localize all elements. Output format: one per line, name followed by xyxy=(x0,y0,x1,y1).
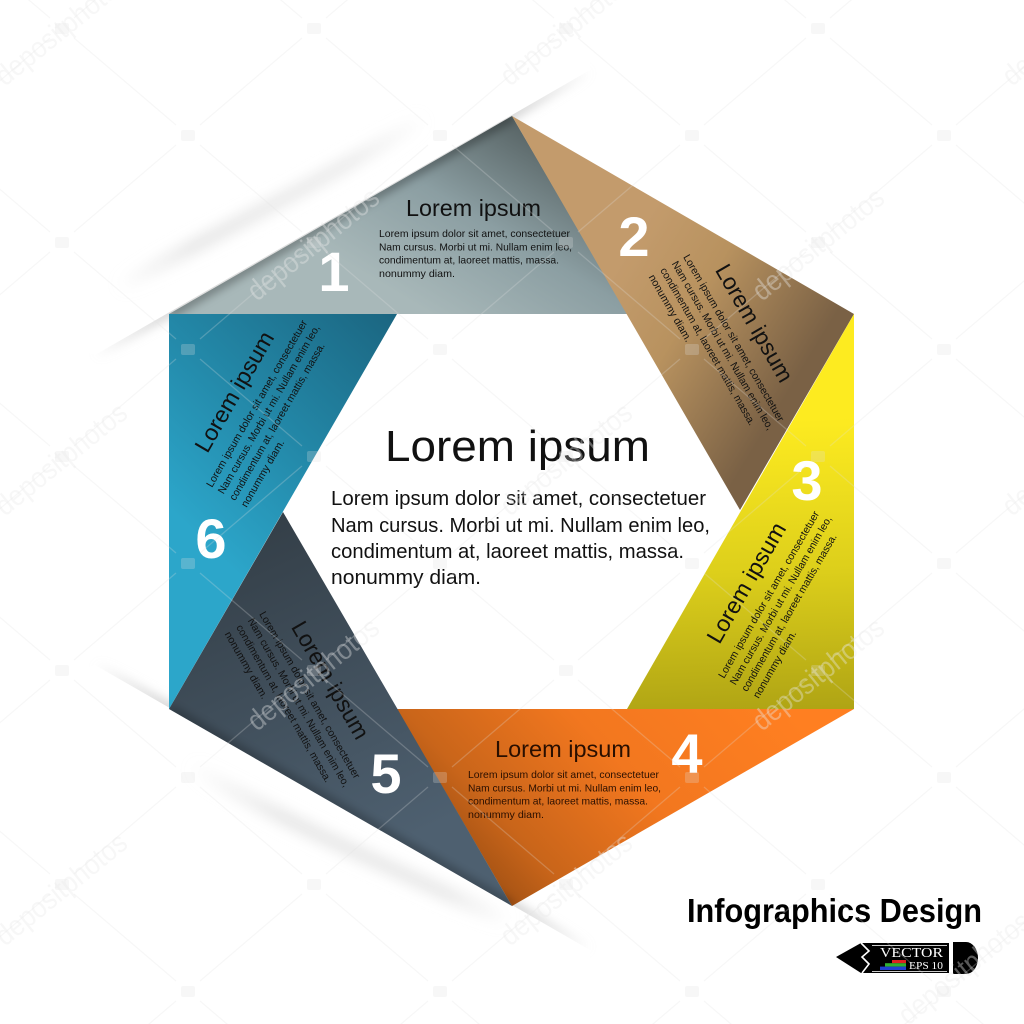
step 1 text: condimentum at, laoreet mattis, massa. xyxy=(379,255,559,267)
edge shadow xyxy=(851,314,861,709)
panel: step 4 xyxy=(397,709,854,906)
center body: nonummy diam. xyxy=(331,566,481,589)
number 2: 2 xyxy=(618,205,650,268)
step 5 text: nonummy diam. xyxy=(222,630,270,701)
panel: step 5 xyxy=(169,512,512,906)
step 3 text: condimentum at, laoreet mattis, massa. xyxy=(739,532,840,694)
panel: step 3 xyxy=(627,314,858,709)
paper fold: upper left xyxy=(60,20,590,355)
slate triangle xyxy=(169,512,512,906)
grey triangle xyxy=(169,116,628,314)
step 4 text: condimentum at, laoreet mattis, massa. xyxy=(468,796,648,808)
watermark text: depositphotos xyxy=(494,397,639,522)
orange triangle xyxy=(397,709,854,906)
step 6 text: condimentum at, laoreet mattis, massa. xyxy=(227,341,328,503)
panel: step 1 xyxy=(169,116,628,314)
paper fold: lower left xyxy=(60,665,590,1000)
step 6 text: nonummy diam. xyxy=(239,438,287,510)
step 5 text: condimentum at, laoreet mattis, massa. xyxy=(233,623,334,785)
step 6 text xyxy=(176,300,346,510)
panel: step 6 xyxy=(169,300,397,709)
step 3 text: Lorem ipsum dolor sit amet, consectetuer xyxy=(716,509,822,680)
step 2 text: Nam cursus. Morbi ut mi. Nullam enim leo, xyxy=(669,259,776,432)
number 3: 3 xyxy=(791,449,823,512)
icon: vector pencil badge: EPS 10 xyxy=(909,961,943,972)
center body: Lorem ipsum dolor sit amet, consectetuer xyxy=(331,487,706,510)
number 4: 4 xyxy=(671,722,703,785)
step 6 text: Nam cursus. Morbi ut mi. Nullam enim leo, xyxy=(216,323,323,496)
center body: Nam cursus. Morbi ut mi. Nullam enim leo, xyxy=(331,514,710,537)
blue triangle xyxy=(169,314,397,709)
yellow triangle xyxy=(627,314,854,709)
edge shadow xyxy=(169,709,512,906)
icon: vector pencil badge: VECTOR xyxy=(880,945,943,960)
step 5 text: Lorem ipsum dolor sit amet, consectetuer xyxy=(256,610,363,781)
step 1 text xyxy=(379,195,572,280)
edge shadow xyxy=(169,116,512,314)
step 5 text: Nam cursus. Morbi ut mi. Nullam enim leo, xyxy=(245,616,352,789)
step 4 text: Nam cursus. Morbi ut mi. Nullam enim leo, xyxy=(468,782,661,794)
panel: step 2 xyxy=(512,116,854,510)
step 2 text xyxy=(646,236,816,446)
step 4 text: Lorem ipsum dolor sit amet, consectetuer xyxy=(468,769,659,781)
watermark text: depositphotos xyxy=(494,827,639,952)
step 4 text: nonummy diam. xyxy=(468,809,544,821)
title: Infographics Design: Infographics Design xyxy=(687,892,982,929)
step 6 text: Lorem ipsum dolor sit amet, consectetuer xyxy=(204,318,310,490)
watermark text: depositphotos xyxy=(746,612,891,737)
step 2 text: condimentum at, laoreet mattis, massa. xyxy=(657,266,758,428)
step 2 text: nonummy diam. xyxy=(646,272,694,344)
step 5 text: Lorem ipsum xyxy=(286,616,375,744)
center body: condimentum at, laoreet mattis, massa. xyxy=(331,540,684,563)
tan triangle xyxy=(512,116,854,510)
watermark text: depositphotos xyxy=(241,182,386,307)
step 5 text xyxy=(222,593,392,803)
step 1 text: Lorem ipsum xyxy=(406,195,541,221)
step 4 text xyxy=(468,736,661,821)
step 1 text: nonummy diam. xyxy=(379,268,455,280)
number 1: 1 xyxy=(318,240,350,303)
step 3 text: Lorem ipsum xyxy=(701,518,791,648)
number 5: 5 xyxy=(370,742,402,805)
step 4 text: Lorem ipsum xyxy=(495,736,631,762)
step 2 text: Lorem ipsum xyxy=(710,259,799,387)
step 1 text: Lorem ipsum dolor sit amet, consectetuer xyxy=(379,228,570,240)
number 6: 6 xyxy=(195,507,227,570)
step 2 text: Lorem ipsum dolor sit amet, consectetuer xyxy=(680,252,787,424)
center heading: Lorem ipsum xyxy=(385,422,650,471)
paper fold: right xyxy=(851,215,894,815)
step 3 text: Nam cursus. Morbi ut mi. Nullam enim leo, xyxy=(728,514,835,687)
step 3 text xyxy=(688,491,858,700)
watermark text: depositphotos xyxy=(746,182,891,307)
watermark text: depositphotos xyxy=(241,612,386,737)
step 6 text: Lorem ipsum xyxy=(189,327,279,457)
icon: vector pencil badge xyxy=(836,942,978,974)
step 1 text: Nam cursus. Morbi ut mi. Nullam enim leo, xyxy=(379,241,572,253)
step 3 text: nonummy diam. xyxy=(751,629,799,700)
center body xyxy=(331,487,710,589)
center text block xyxy=(331,422,710,589)
